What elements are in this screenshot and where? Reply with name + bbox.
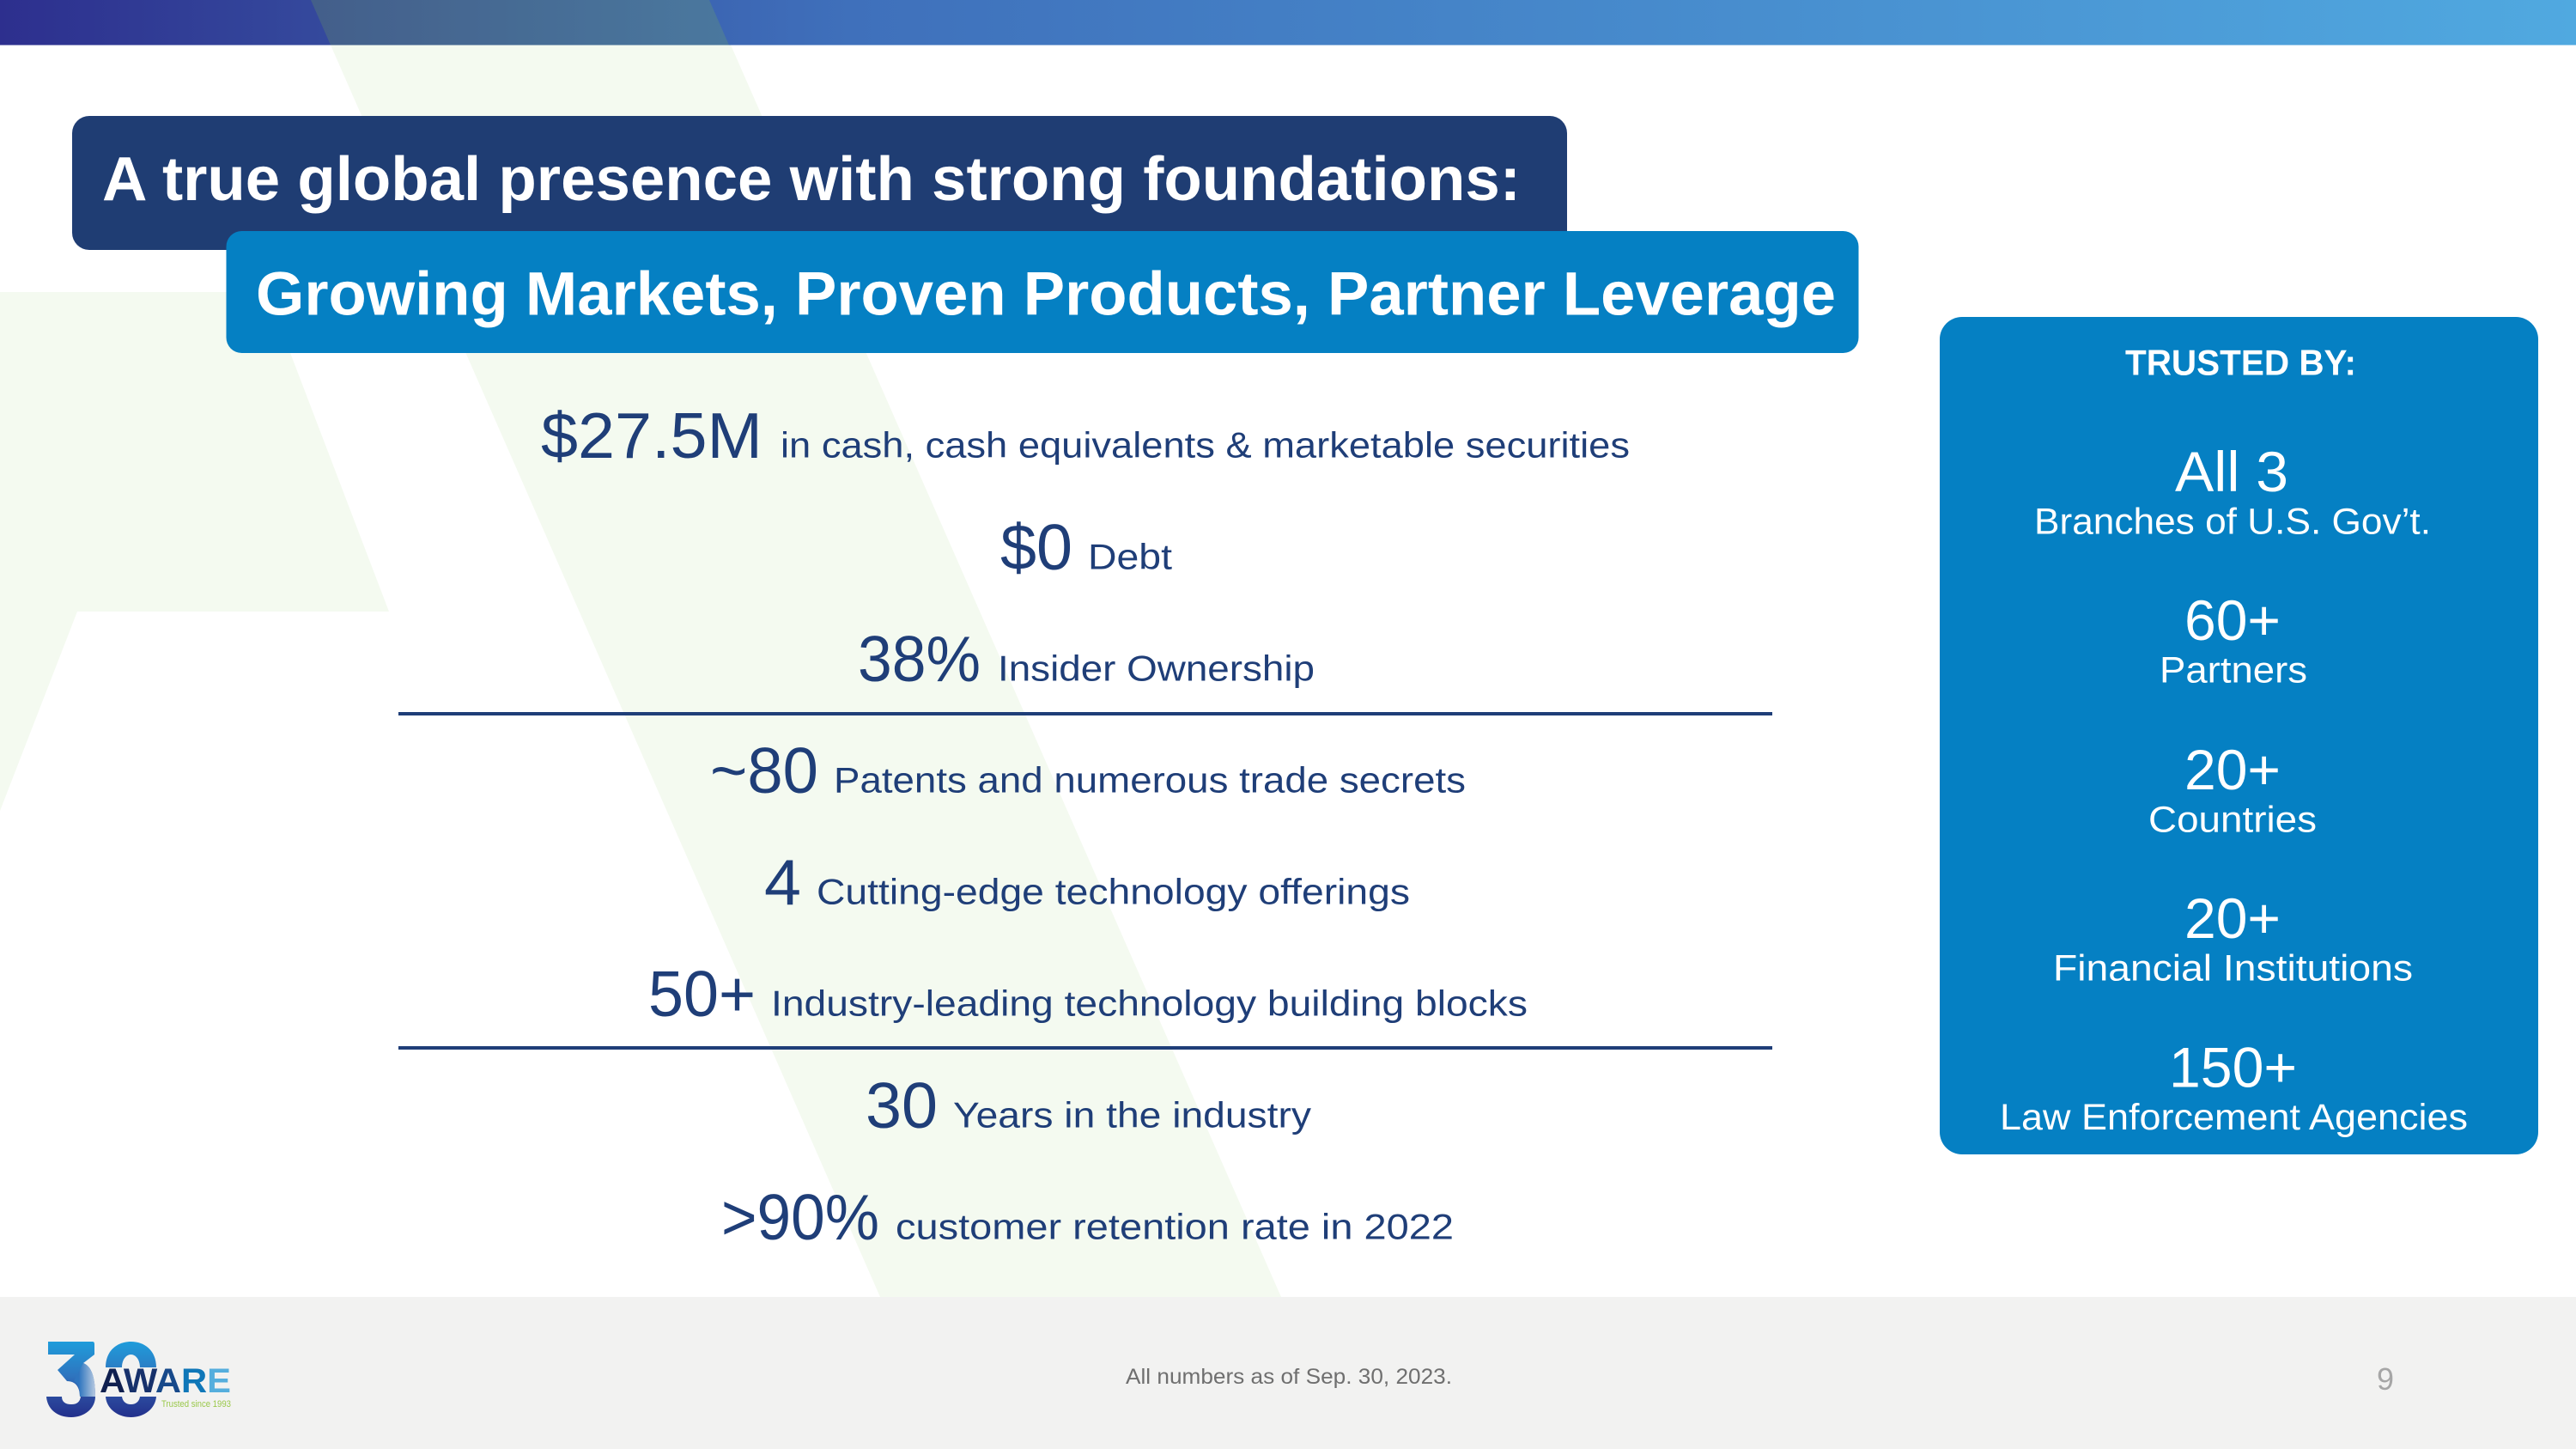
stat: years in industry: 30: [866, 1069, 938, 1142]
title banner: A true global presence with strong foundations:: [102, 145, 1521, 214]
stat: retention: >90%: [721, 1181, 879, 1253]
item: countries: Countries: [2148, 799, 2317, 840]
item: financial institutions: Financial Institutions: [2053, 948, 2413, 989]
subtitle banner: Growing Markets, Proven Products, Partner Leverage: [256, 261, 1836, 328]
item: countries: 20+: [2184, 738, 2281, 801]
subtitle banner: [227, 231, 1858, 353]
item: financial institutions: 20+: [2184, 886, 2281, 950]
item: law enforcement: Law Enforcement Agencies: [2000, 1097, 2468, 1138]
item: partners: [2160, 588, 2307, 691]
item: financial institutions: [2053, 886, 2413, 989]
stat: cash: $27.5M: [541, 399, 762, 472]
stat: years in industry: Years in the industry: [953, 1094, 1311, 1135]
panel: trusted by: [1940, 317, 2538, 1154]
stat: debt: Debt: [1088, 536, 1172, 577]
stat: patents: [710, 734, 1466, 807]
stat: patents: ~80: [710, 734, 818, 807]
stat: cash: [541, 399, 1630, 472]
stat: building blocks: Industry-leading technology building blocks: [771, 983, 1528, 1024]
background: left green chevron: [0, 292, 389, 811]
title banner: [72, 116, 1567, 250]
stat: patents: Patents and numerous trade secrets: [834, 759, 1466, 801]
stat: technology offerings: Cutting-edge technology offerings: [817, 871, 1410, 912]
stat: years in industry: [866, 1069, 1311, 1142]
stat: technology offerings: [764, 846, 1410, 918]
panel heading: TRUSTED BY:: [2125, 342, 2356, 383]
stat: debt: $0: [1000, 511, 1072, 583]
stat: building blocks: 50+: [648, 958, 756, 1030]
item: law enforcement: 150+: [2169, 1036, 2297, 1099]
item: government: [2034, 440, 2431, 543]
logo: 30 Aware: Trusted since 1993: [161, 1399, 231, 1409]
stat: insider ownership: 38%: [858, 623, 981, 695]
top gradient bar: [0, 0, 2576, 45]
item: government: Branches of U.S. Gov’t.: [2034, 502, 2431, 543]
stat: insider ownership: Insider Ownership: [998, 648, 1315, 689]
item: countries: [2148, 738, 2317, 840]
item: law enforcement: [2000, 1036, 2468, 1138]
stat: retention: customer retention rate in 2022: [896, 1206, 1454, 1247]
item: partners: 60+: [2184, 588, 2281, 652]
stat: cash: in cash, cash equivalents & marketable securities: [781, 424, 1630, 466]
background: diagonal green stripe: [311, 0, 1281, 1297]
stat: debt: [1000, 511, 1172, 583]
stat: retention: [721, 1181, 1454, 1253]
item: government: All 3: [2175, 440, 2288, 503]
logo: 30 Aware: AWARE: [100, 1362, 231, 1400]
stat: building blocks: [648, 958, 1528, 1030]
stat: technology offerings: 4: [764, 846, 801, 918]
stat: insider ownership: [858, 623, 1315, 695]
page number: 9: [2377, 1361, 2394, 1397]
logo: 30 Aware: [46, 1342, 231, 1417]
footnote: All numbers as of Sep. 30, 2023.: [1126, 1365, 1452, 1389]
item: partners: Partners: [2160, 649, 2307, 691]
footer band: [0, 1297, 2576, 1449]
